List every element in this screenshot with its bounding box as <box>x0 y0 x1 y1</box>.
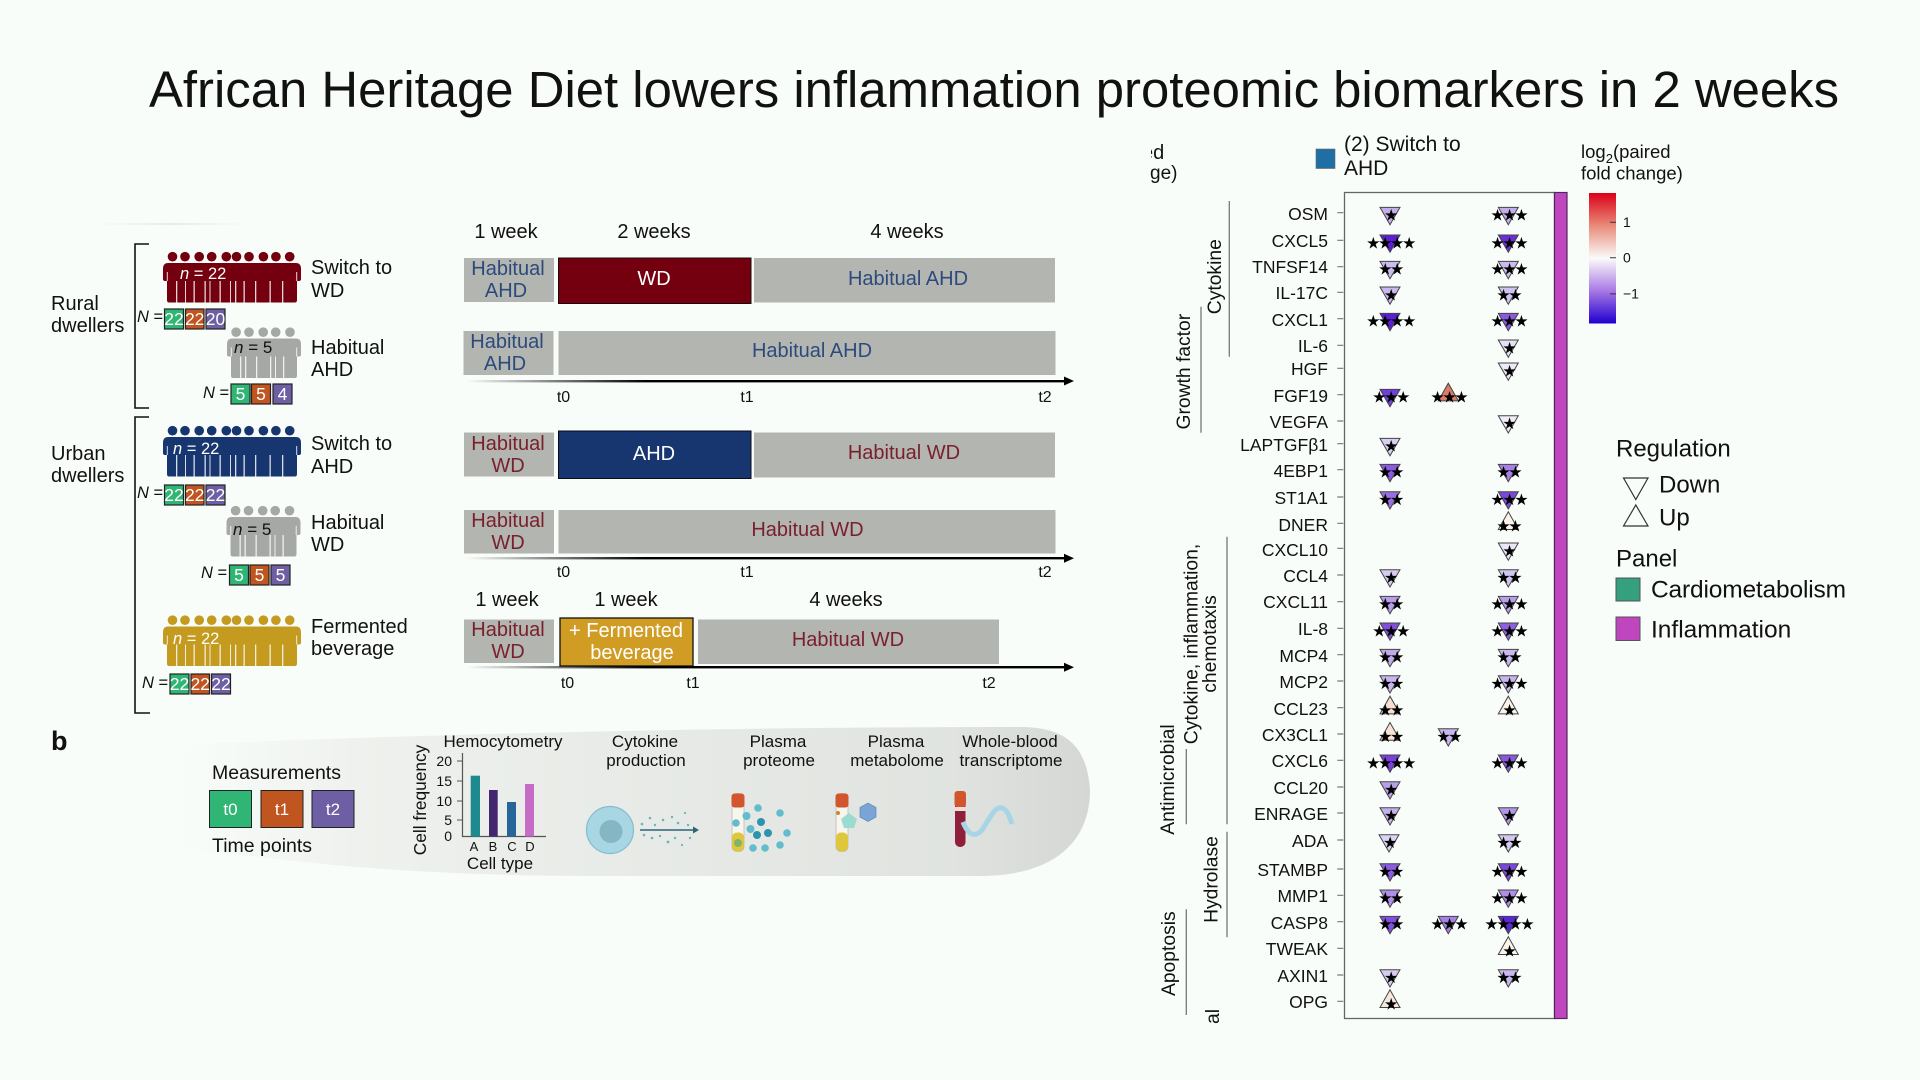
significance markers: ★★★ <box>1490 206 1528 225</box>
legend: regulation: Regulation <box>1616 436 1731 462</box>
significance markers: ★★ <box>1496 968 1522 987</box>
timeline: urban switch to AHD: WD <box>491 455 525 477</box>
bar chart: cell frequency: 5 <box>444 812 452 828</box>
durations: top <box>474 221 944 243</box>
group: urban switch to AHD: N = <box>137 484 163 502</box>
durations: fermented: 1 week <box>475 589 540 611</box>
protein names and ticks: CXCL1 <box>1272 310 1328 330</box>
significance markers: ★★ <box>1378 862 1404 881</box>
bar chart: cell frequency: Cell type <box>467 854 533 873</box>
column headings: metabolome <box>850 751 944 770</box>
significance markers: ★★ <box>1378 260 1404 279</box>
timeline: urban switch to AHD: AHD <box>633 443 675 465</box>
group: fermented beverage: 22 <box>170 674 189 694</box>
protein names and ticks: CXCL10 <box>1262 540 1328 560</box>
arrow: time axis 2: t0 <box>557 564 570 581</box>
significance markers: ★★ <box>1378 490 1404 509</box>
significance markers: ★ <box>1502 941 1516 960</box>
timeline: fermented beverage: + Fermented <box>569 620 683 642</box>
significance markers: ★★★ <box>1490 260 1528 279</box>
protein names and ticks: IL-17C <box>1275 283 1328 303</box>
arrow: time axis 1: t0 <box>557 389 570 406</box>
group: urban habitual WD: WD <box>311 534 344 556</box>
legend: colour scale: 0 <box>1623 250 1631 266</box>
time point key: Time points <box>212 835 312 857</box>
significance markers: ★★★ <box>1372 621 1410 640</box>
group: urban switch to AHD: 22 <box>185 485 204 505</box>
arrow: time axis 2: t1 <box>740 564 754 581</box>
timeline: rural switch to WD: WD <box>637 268 671 290</box>
significance markers: ★ <box>1384 285 1398 304</box>
timeline: rural habitual AHD: Habitual <box>470 331 544 353</box>
icon: whole-blood tube and RNA <box>954 791 1012 847</box>
significance markers: ★ <box>1384 806 1398 825</box>
significance markers: ★★★★ <box>1366 312 1416 331</box>
category labels: chemotaxis <box>1200 595 1221 693</box>
group: urban habitual WD: 5 <box>276 565 285 585</box>
timeline: urban habitual WD: Habitual WD <box>751 519 864 541</box>
time point key <box>210 762 354 857</box>
significance markers: ★★ <box>1496 648 1522 667</box>
protein names and ticks: FGF19 <box>1274 386 1328 406</box>
protein names and ticks: AXIN1 <box>1277 966 1328 986</box>
bar chart: cell frequency: B <box>489 839 497 854</box>
significance markers: ★ <box>1502 541 1516 560</box>
timeline: fermented beverage: WD <box>491 641 525 663</box>
bar chart: cell frequency: D <box>525 839 535 854</box>
bar chart: cell frequency: 0 <box>444 828 452 844</box>
significance markers: ★★★ <box>1490 621 1528 640</box>
column headings: production <box>606 751 686 770</box>
group: rural habitual AHD: 4 <box>278 384 288 404</box>
protein names and ticks: IL-6 <box>1298 336 1328 356</box>
significance markers: ★★ <box>1496 285 1522 304</box>
protein names and ticks: ADA <box>1292 831 1328 851</box>
timeline: rural switch to WD <box>464 258 1055 304</box>
legend: colour scale: fold change) <box>1581 162 1683 184</box>
timeline: rural habitual AHD: AHD <box>484 353 526 375</box>
panel b label: b <box>51 726 68 756</box>
legend: panel: Inflammation <box>1651 616 1791 644</box>
group: urban habitual WD: 5 <box>234 565 244 585</box>
category labels: Apoptosis <box>1159 911 1180 996</box>
significance markers: ★★ <box>1496 568 1522 587</box>
legend: colour scale: (paired <box>1613 141 1671 162</box>
timeline: urban switch to AHD: Habitual WD <box>848 442 960 464</box>
significance markers: ★★★ <box>1490 674 1528 693</box>
group: rural switch to WD: 22 <box>185 309 204 329</box>
title: African Heritage Diet lowers inflammation proteomic biomarkers in 2 weeks <box>149 61 1839 118</box>
significance markers: ★★★ <box>1430 915 1468 934</box>
protein names and ticks: CCL23 <box>1274 699 1328 719</box>
category labels: Hydrolase <box>1201 836 1222 923</box>
significance markers: ★ <box>1383 833 1397 852</box>
panel: study design cohorts <box>51 244 408 713</box>
protein names and ticks <box>1240 204 1343 1012</box>
protein names and ticks: ST1A1 <box>1274 488 1328 508</box>
legend: switch to AHD <box>1142 133 1461 184</box>
group: urban switch to AHD: 22 <box>164 485 184 505</box>
group: urban habitual WD: N = <box>201 564 227 582</box>
time point key: t2 <box>326 800 340 819</box>
protein names and ticks: VEGFA <box>1270 412 1328 432</box>
group: rural switch to WD: WD <box>311 280 344 302</box>
column headings: Plasma <box>750 732 807 751</box>
legend: switch to AHD: AHD <box>1344 157 1388 180</box>
group: rural switch to WD: n = 22 <box>180 265 226 283</box>
bracket: rural <box>135 244 149 408</box>
legend: regulation: Down <box>1659 472 1720 498</box>
bar chart: cell frequency: A <box>470 839 479 854</box>
significance markers: ★ <box>1502 338 1516 357</box>
durations: fermented <box>475 589 883 611</box>
arrow: time axis 3: t2 <box>982 675 996 692</box>
significance markers: ★★★ <box>1490 233 1528 252</box>
label: urban dwellers: dwellers <box>51 465 124 487</box>
group: urban habitual WD: n = 5 <box>233 520 271 539</box>
significance markers: ★★ <box>1378 701 1404 720</box>
significance markers: ★ <box>1384 780 1398 799</box>
significance markers: ★★★★ <box>1366 233 1416 252</box>
time point key: t1 <box>275 800 289 819</box>
group: rural habitual AHD <box>203 327 384 404</box>
group: urban switch to AHD <box>137 426 392 505</box>
significance markers: ★★ <box>1496 833 1522 852</box>
timeline: rural switch to WD: Habitual <box>471 258 545 280</box>
time point key: Measurements <box>212 762 341 784</box>
column headings: Whole-blood <box>962 732 1058 751</box>
protein names and ticks: LAPTGFβ1 <box>1240 435 1328 455</box>
significance markers: ★★ <box>1378 648 1404 667</box>
durations: fermented: 4 weeks <box>809 589 883 611</box>
group: rural switch to WD: N = <box>137 308 163 326</box>
bar chart: cell frequency: 15 <box>436 773 452 789</box>
timeline: rural switch to WD: AHD <box>485 280 527 302</box>
protein names and ticks: OSM <box>1288 204 1328 224</box>
bar chart: cell frequency: 10 <box>436 793 452 809</box>
protein names and ticks: CASP8 <box>1271 913 1328 933</box>
group: rural habitual AHD: N = <box>203 384 229 402</box>
bar chart: cell frequency <box>410 744 546 873</box>
significance markers: ★★ <box>1378 463 1404 482</box>
significance markers: ★ <box>1502 701 1516 720</box>
group: fermented beverage: 22 <box>190 674 210 694</box>
protein names and ticks: MCP4 <box>1279 646 1328 666</box>
significance markers: ★★★ <box>1490 753 1528 772</box>
bracket: urban <box>135 417 150 713</box>
label: urban dwellers: Urban <box>51 443 105 465</box>
group: rural switch to WD <box>137 252 392 329</box>
protein names and ticks: CCL20 <box>1274 778 1328 798</box>
significance markers: ★★★ <box>1372 388 1410 407</box>
significance markers: ★ <box>1384 568 1398 587</box>
protein names and ticks: TNFSF14 <box>1252 257 1328 277</box>
significance markers: ★ <box>1384 206 1398 225</box>
background blob <box>175 727 1090 876</box>
column headings: transcriptome <box>960 751 1062 770</box>
arrow: time axis 1 <box>466 376 1074 406</box>
timeline: urban habitual WD: Habitual <box>471 510 545 532</box>
group: urban habitual WD <box>201 506 384 585</box>
timeline: rural habitual AHD <box>464 331 1056 375</box>
group: rural habitual AHD: Habitual <box>311 337 384 359</box>
protein names and ticks: CXCL5 <box>1272 231 1328 251</box>
bar chart: cell frequency: 20 <box>436 753 452 769</box>
durations: top: 4 weeks <box>870 221 944 243</box>
significance markers <box>1366 206 1534 1013</box>
significance markers: ★★ <box>1378 674 1404 693</box>
group: urban switch to AHD: AHD <box>311 456 353 478</box>
significance markers: ★★ <box>1378 888 1404 907</box>
category labels: Cytokine <box>1205 239 1226 314</box>
durations: top: 1 week <box>474 221 539 243</box>
significance markers: ★ <box>1502 414 1516 433</box>
icon: cell secreting cytokines <box>586 806 699 854</box>
time point key: t0 <box>223 800 238 819</box>
timeline: rural habitual AHD: Habitual AHD <box>752 340 872 362</box>
group: rural habitual AHD: AHD <box>311 359 353 381</box>
significance markers: ★ <box>1502 806 1516 825</box>
legend: switch to AHD: (2) Switch to <box>1344 133 1461 156</box>
timeline: urban habitual WD <box>464 510 1056 554</box>
timeline: fermented beverage <box>464 618 999 666</box>
significance markers: ★★ <box>1496 463 1522 482</box>
group: urban habitual WD: Habitual <box>311 512 384 534</box>
group: rural habitual AHD: 5 <box>256 384 266 404</box>
arrow: time axis 3: t0 <box>561 675 574 692</box>
significance markers: ★★★ <box>1490 888 1528 907</box>
group: fermented beverage <box>142 615 408 694</box>
arrow: time axis 3 <box>466 663 1074 692</box>
significance markers: ★ <box>1502 361 1516 380</box>
arrow: time axis 2: t2 <box>1038 564 1052 581</box>
significance markers: ★ <box>1384 437 1398 456</box>
significance markers: ★★ <box>1496 516 1522 535</box>
timeline: fermented beverage: Habitual <box>471 619 545 641</box>
legend: regulation <box>1616 436 1731 532</box>
group: fermented beverage: Fermented <box>311 616 408 638</box>
column headings: proteome <box>743 751 815 770</box>
column headings: Cytokine <box>612 732 678 751</box>
column headings <box>443 732 1062 770</box>
group: urban switch to AHD: 22 <box>206 485 225 505</box>
significance markers: ★ <box>1384 994 1398 1013</box>
column headings: Plasma <box>868 732 925 751</box>
legend: colour scale: −1 <box>1623 286 1639 302</box>
protein names and ticks: CX3CL1 <box>1262 725 1328 745</box>
timeline: urban habitual WD: WD <box>491 532 525 554</box>
protein names and ticks: 4EBP1 <box>1274 461 1328 481</box>
bar chart: cell frequency: Cell frequency <box>410 744 430 855</box>
icon: plasma metabolome tube and molecules <box>836 794 876 852</box>
legend: panel: Cardiometabolism <box>1651 576 1846 604</box>
protein names and ticks: MMP1 <box>1277 886 1328 906</box>
protein names and ticks: CXCL6 <box>1272 751 1328 771</box>
panel: diet timelines <box>464 221 1074 692</box>
legend: colour scale: 2 <box>1606 151 1613 166</box>
protein names and ticks: HGF <box>1291 359 1328 379</box>
timeline: urban switch to AHD: Habitual <box>471 433 545 455</box>
legend: panel <box>1616 546 1846 644</box>
protein names and ticks: DNER <box>1278 515 1328 535</box>
timeline: fermented beverage: beverage <box>590 642 674 664</box>
significance markers: ★★ <box>1378 727 1404 746</box>
timeline: rural switch to WD: Habitual AHD <box>848 268 968 290</box>
category labels: Growth factor <box>1174 313 1195 430</box>
group: rural switch to WD: 20 <box>206 309 225 329</box>
durations: top: 2 weeks <box>617 221 691 243</box>
protein names and ticks: CCL4 <box>1283 566 1328 586</box>
significance markers: ★★ <box>1436 727 1462 746</box>
legend: colour scale: log <box>1581 141 1606 162</box>
group: rural switch to WD: 22 <box>164 309 184 329</box>
timeline: fermented beverage: Habitual WD <box>792 629 904 651</box>
column headings: Hemocytometry <box>443 732 563 751</box>
category labels: al <box>1203 1009 1224 1024</box>
legend: colour scale <box>1581 141 1683 324</box>
significance markers: ★★★ <box>1490 490 1528 509</box>
group: urban switch to AHD: Switch to <box>311 433 392 455</box>
panel: protein heatmap <box>1142 133 1567 1024</box>
heatmap frame and inflammation strip <box>1344 192 1567 1018</box>
category labels <box>1158 201 1229 1024</box>
panel: measurements <box>175 727 1090 876</box>
protein names and ticks: CXCL11 <box>1263 592 1328 612</box>
significance markers: ★★★★ <box>1366 753 1416 772</box>
protein names and ticks: TWEAK <box>1266 939 1328 959</box>
group: rural habitual AHD: n = 5 <box>234 338 272 357</box>
protein names and ticks: STAMBP <box>1257 860 1328 880</box>
category labels: Cytokine, inflammation, <box>1181 544 1202 744</box>
legend: switch to AHD: ge) <box>1150 163 1177 184</box>
group: fermented beverage: N = <box>142 674 168 692</box>
group: fermented beverage: 22 <box>211 674 231 694</box>
protein names and ticks: OPG <box>1289 992 1328 1012</box>
group: rural habitual AHD: 5 <box>236 384 245 404</box>
timeline: urban switch to AHD <box>464 431 1055 478</box>
arrow: time axis 1: t2 <box>1038 389 1052 406</box>
significance markers: ★★★★ <box>1484 915 1534 934</box>
icon: plasma proteome tube and proteins <box>732 794 791 852</box>
durations: fermented: 1 week <box>594 589 659 611</box>
legend: panel: Panel <box>1616 546 1677 572</box>
group: urban switch to AHD: n = 22 <box>173 440 219 458</box>
legend: colour scale: 1 <box>1623 214 1631 230</box>
label: rural dwellers: dwellers <box>51 315 124 337</box>
significance markers: ★★ <box>1378 595 1404 614</box>
significance markers: ★★★ <box>1490 862 1528 881</box>
significance markers: ★★ <box>1378 915 1404 934</box>
significance markers: ★★★ <box>1490 312 1528 331</box>
arrow: time axis 1: t1 <box>740 389 754 406</box>
bar chart: cell frequency: C <box>507 839 517 854</box>
group: urban habitual WD: 5 <box>255 565 264 585</box>
group: rural switch to WD: Switch to <box>311 257 392 279</box>
protein names and ticks: MCP2 <box>1279 672 1328 692</box>
arrow: time axis 2 <box>466 554 1074 581</box>
label: rural dwellers: Rural <box>51 293 99 315</box>
legend: switch to AHD: ed <box>1142 142 1164 164</box>
significance markers: ★★★ <box>1490 595 1528 614</box>
group: fermented beverage: n = 22 <box>173 630 219 648</box>
category labels: Antimicrobial <box>1158 724 1179 835</box>
protein names and ticks: IL-8 <box>1298 619 1328 639</box>
group: fermented beverage: beverage <box>311 638 394 660</box>
legend: regulation: Up <box>1659 504 1690 532</box>
significance markers: ★ <box>1384 968 1398 987</box>
arrow: time axis 3: t1 <box>686 675 700 692</box>
significance markers: ★★★ <box>1430 388 1468 407</box>
protein names and ticks: ENRAGE <box>1254 804 1328 824</box>
